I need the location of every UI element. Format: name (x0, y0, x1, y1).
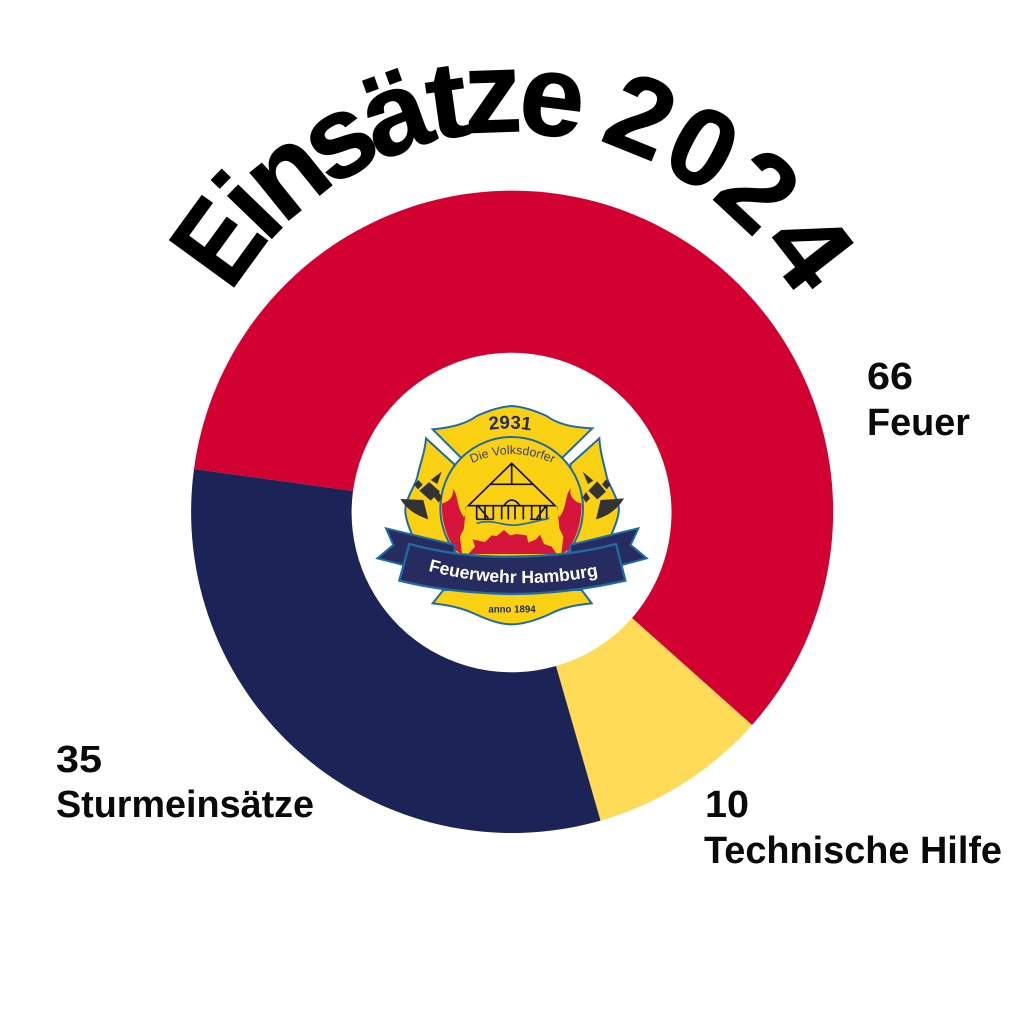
water line (477, 518, 549, 525)
title: Einsätze 2024: 2 (694, 125, 823, 256)
title: Einsätze 2024: e (513, 27, 593, 164)
label: Sturmeinsätze: Sturmeinsätze (56, 784, 314, 826)
label: Feuer: Feuer (867, 402, 970, 444)
badge left wing (405, 438, 460, 550)
label: Sturmeinsätze (56, 739, 314, 826)
segment: Feuer 66 (194, 191, 833, 725)
house (468, 463, 555, 519)
badge center circle (440, 437, 583, 580)
ribbon banner (399, 544, 625, 594)
title: Einsätze 2024: n (216, 99, 353, 245)
left helmet emblem (400, 472, 442, 519)
donut chart (191, 191, 833, 833)
label: Feuer (867, 356, 970, 444)
title: Einsätze 2024: E (146, 176, 291, 308)
label: Feuer: 66 (867, 356, 913, 398)
label: Technische Hilfe: Technische Hilfe (704, 830, 1002, 872)
segment: Technische Hilfe 10 (556, 618, 752, 821)
title: Einsätze 2024: i (191, 149, 305, 261)
title: Einsätze 2024: 4 (741, 184, 879, 313)
badge right wing (563, 438, 619, 550)
ribbon tails (377, 528, 455, 565)
badge bottom arm (433, 590, 592, 624)
text anno 1894: anno 1894 (488, 604, 536, 615)
title: Einsätze 2024: t (418, 39, 475, 163)
right helmet emblem (583, 472, 624, 519)
title: Einsätze 2024 (146, 26, 879, 313)
title: Einsätze 2024: 0 (647, 79, 758, 217)
label: Technische Hilfe (704, 784, 1002, 872)
title: Einsätze 2024: z (461, 26, 524, 158)
flames (442, 488, 581, 554)
segment: Sturmeinsätze 35 (191, 469, 600, 833)
title: Einsätze 2024: 2 (590, 48, 692, 185)
logo: Feuerwehr Hamburg badge (375, 405, 649, 626)
badge top arm (433, 406, 592, 490)
badge text Die Volksdorfer: Die Volksdorfer (470, 445, 556, 463)
badge number 2931: 2931 (489, 416, 530, 430)
label: Technische Hilfe: 10 (705, 784, 749, 826)
title: Einsätze 2024: ä (342, 40, 447, 185)
title: Einsätze 2024: s (276, 64, 399, 209)
ribbon text Feuerwehr Hamburg: Feuerwehr Hamburg (429, 559, 598, 584)
label: Sturmeinsätze: 35 (56, 739, 102, 781)
